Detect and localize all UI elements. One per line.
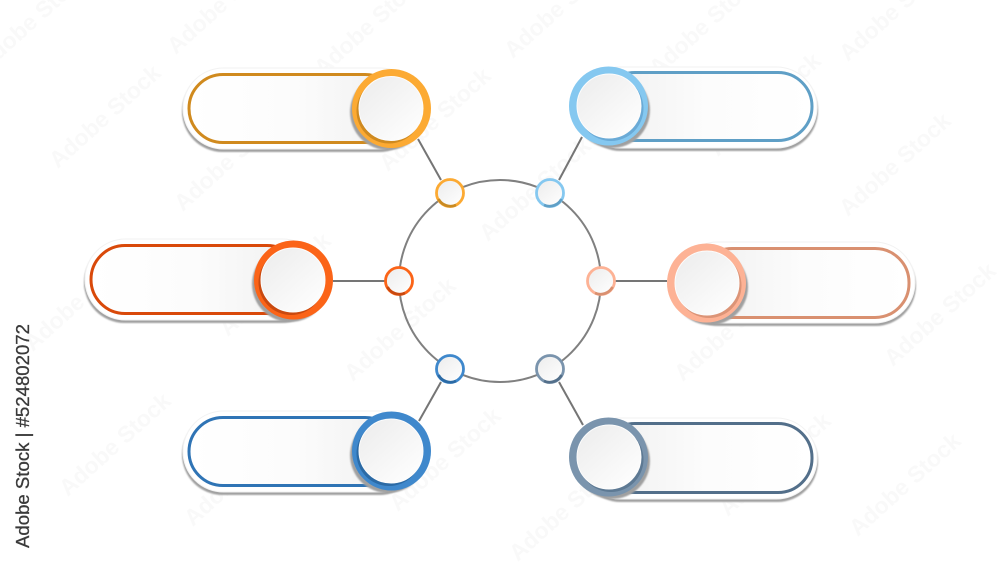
- connector lines: [333, 137, 667, 425]
- watermark pattern: Adobe Stock: [214, 227, 336, 341]
- panel: top right: [569, 66, 818, 151]
- watermark pattern: Adobe Stock: [714, 407, 836, 521]
- panel: bottom left: [182, 411, 431, 495]
- watermark pattern: Adobe Stock: [374, 62, 496, 176]
- watermark pattern: Adobe Stock: [44, 59, 166, 173]
- watermark pattern: Adobe Stock: [474, 132, 596, 246]
- watermark pattern: Adobe Stock: [834, 107, 956, 221]
- watermark pattern: Adobe Stock: [54, 387, 176, 501]
- panel: middle right: [667, 242, 916, 326]
- watermark pattern: Adobe Stock: [384, 402, 506, 516]
- watermark pattern: Adobe Stock: [169, 102, 291, 216]
- panel: bottom right: [569, 418, 818, 502]
- watermark pattern: Adobe Stock: [669, 272, 791, 386]
- watermark pattern: Adobe Stock: [704, 47, 826, 161]
- node: bottom right: [536, 356, 564, 382]
- watermark pattern: Adobe Stock: [879, 257, 1000, 371]
- watermark pattern: Adobe Stock: [19, 242, 141, 356]
- watermark pattern: Adobe Stock: [339, 272, 461, 386]
- node: top right: [536, 180, 564, 206]
- panel: middle left: [84, 239, 333, 323]
- panel: top left: [182, 68, 431, 152]
- node: middle right: [588, 268, 614, 294]
- side credit text: Adobe Stock | #524802072: [13, 324, 33, 548]
- node: top left: [436, 180, 464, 206]
- node: middle left: [386, 268, 412, 294]
- node: bottom left: [436, 356, 464, 382]
- watermark pattern: Adobe Stock: [504, 452, 626, 563]
- watermark pattern: Adobe Stock: [179, 417, 301, 531]
- central hub circle: [399, 180, 601, 382]
- watermark pattern: Adobe Stock: [844, 427, 966, 541]
